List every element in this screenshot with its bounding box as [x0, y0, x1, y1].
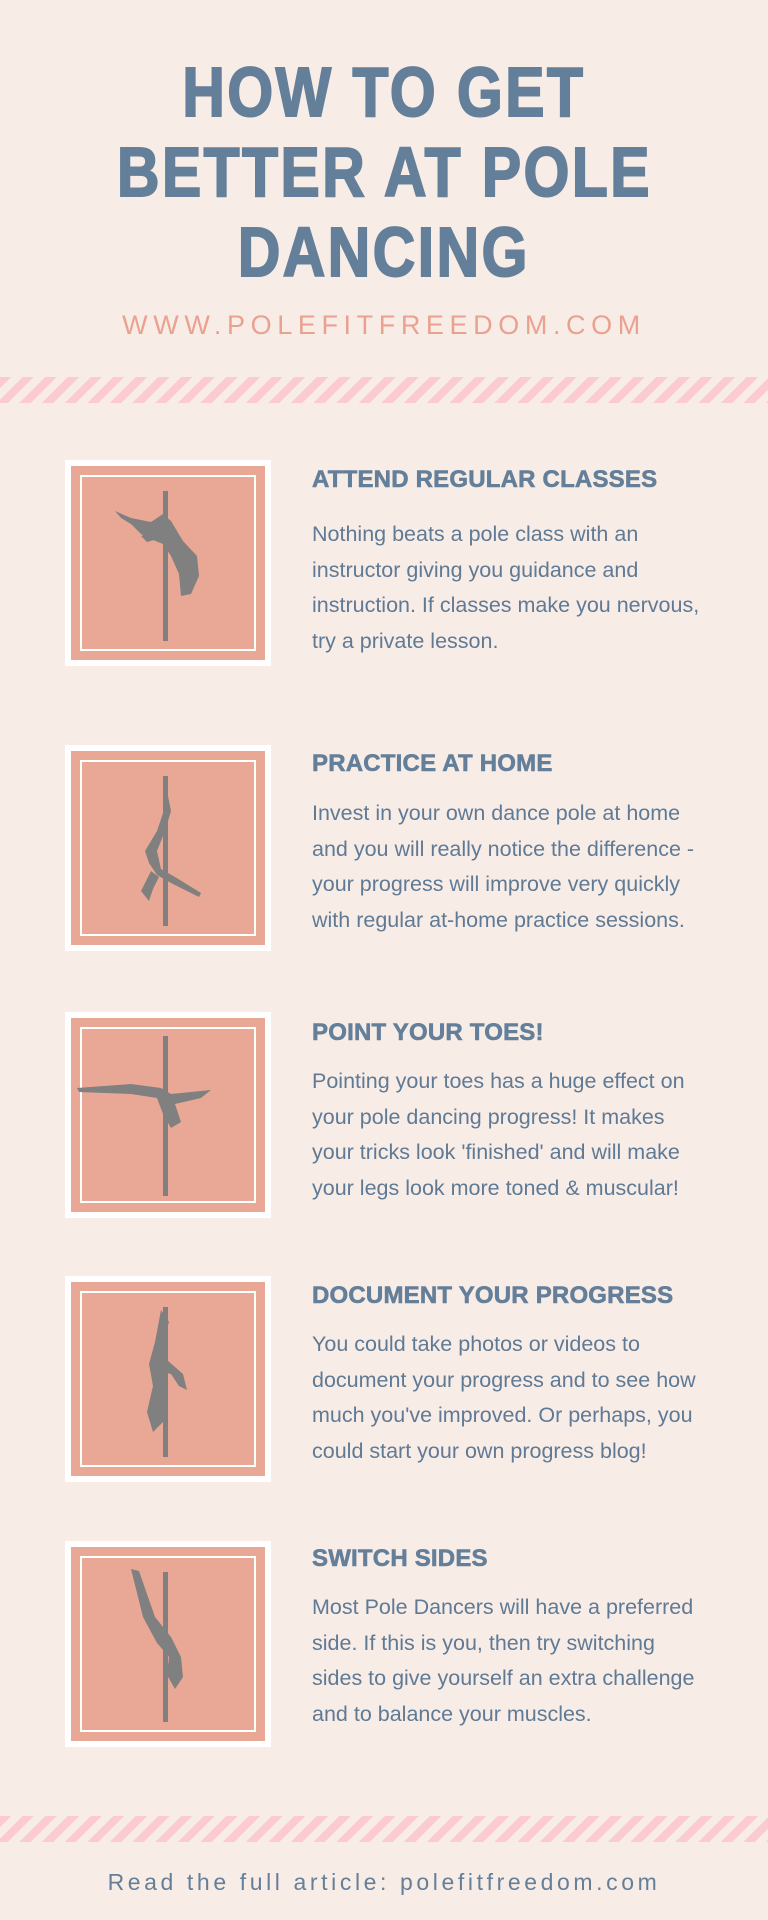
- body text: your pole dancing progress! It makes: [312, 1104, 665, 1128]
- panel: switch sides: [65, 1541, 694, 1747]
- top stripe band: [0, 377, 768, 403]
- body text: [312, 1595, 694, 1726]
- title: [116, 53, 652, 291]
- title: HOW TO GET: [182, 53, 586, 131]
- body text: document your progress and to see how: [312, 1368, 696, 1392]
- panel: attend regular classes: [65, 460, 699, 666]
- bottom stripe band: [0, 1816, 768, 1842]
- heading: POINT YOUR TOES!: [312, 1019, 544, 1046]
- panel: document your progress: [65, 1276, 696, 1482]
- title: BETTER AT POLE: [116, 133, 652, 211]
- body text: and to balance your muscles.: [312, 1702, 592, 1726]
- body text: and you will really notice the difference -: [312, 836, 694, 860]
- icon: pole dancer 1: [65, 460, 271, 666]
- body text: could start your own progress blog!: [312, 1438, 647, 1462]
- body text: instruction. If classes make you nervous,: [312, 593, 699, 617]
- heading: ATTEND REGULAR CLASSES: [312, 466, 657, 493]
- body text: Pointing your toes has a huge effect on: [312, 1069, 685, 1093]
- body text: your tricks look 'finished' and will make: [312, 1140, 680, 1164]
- heading: DOCUMENT YOUR PROGRESS: [312, 1282, 673, 1309]
- body text: much you've improved. Or perhaps, you: [312, 1403, 693, 1427]
- body text: Most Pole Dancers will have a preferred: [312, 1595, 693, 1619]
- title: DANCING: [238, 213, 530, 291]
- heading: SWITCH SIDES: [312, 1545, 488, 1572]
- body text: your legs look more toned & muscular!: [312, 1176, 679, 1200]
- body text: try a private lesson.: [312, 628, 498, 652]
- icon: pole dancer 5: [65, 1541, 271, 1747]
- icon: pole dancer 2: [65, 745, 271, 951]
- body text: with regular at-home practice sessions.: [312, 908, 685, 932]
- body text: sides to give yourself an extra challenge: [312, 1666, 694, 1690]
- body text: side. If this is you, then try switching: [312, 1630, 655, 1654]
- panel: practice at home: [65, 745, 694, 951]
- body text: instructor giving you guidance and: [312, 558, 638, 582]
- body text: [312, 1332, 696, 1462]
- panel: point your toes: [65, 1012, 685, 1218]
- body text: [312, 1069, 685, 1200]
- body text: Nothing beats a pole class with an: [312, 522, 638, 546]
- body text: your progress will improve very quickly: [312, 872, 680, 896]
- footer text: Read the full article: polefitfreedom.com: [108, 1869, 660, 1895]
- heading: PRACTICE AT HOME: [312, 750, 553, 777]
- subtitle: website: WWW.POLEFITFREEDOM.COM: [122, 310, 646, 340]
- body text: [312, 522, 699, 652]
- icon: pole dancer 3: [65, 1012, 271, 1218]
- body text: Invest in your own dance pole at home: [312, 801, 680, 825]
- icon: pole dancer 4: [65, 1276, 271, 1482]
- body text: You could take photos or videos to: [312, 1332, 640, 1356]
- body text: [312, 801, 694, 932]
